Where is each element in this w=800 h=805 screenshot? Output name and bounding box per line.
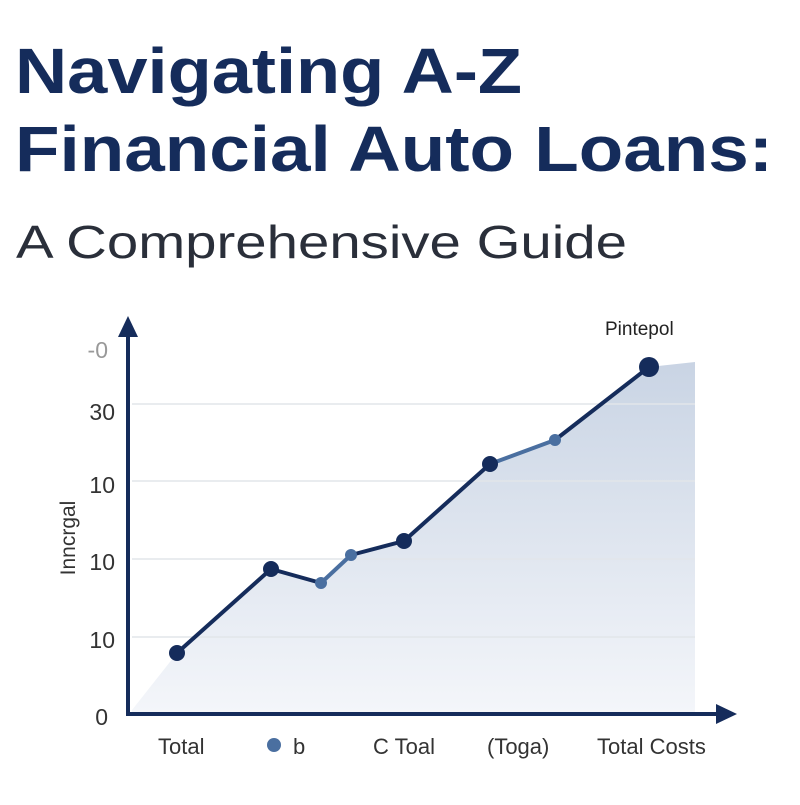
y tick labels: 0 xyxy=(95,704,108,730)
y tick labels: 10 xyxy=(89,627,115,653)
x labels: (Toga) xyxy=(487,734,549,759)
x labels: C Toal xyxy=(373,734,435,759)
area fill xyxy=(132,362,695,714)
y tick labels: 10 xyxy=(89,472,115,498)
x labels: Total Costs xyxy=(597,734,706,759)
title xyxy=(15,35,773,268)
x labels: Total xyxy=(158,734,204,759)
title: A Comprehensive Guide xyxy=(16,216,627,268)
chart xyxy=(57,316,737,759)
axes xyxy=(118,316,737,724)
y tick labels: 10 xyxy=(89,549,115,575)
x labels: b xyxy=(293,734,305,759)
y axis title: Inncrgal xyxy=(57,501,80,575)
y tick labels xyxy=(88,337,115,730)
data points xyxy=(169,357,659,661)
y tick labels: 30 xyxy=(89,399,115,425)
annotation: Pintepol xyxy=(605,319,674,340)
title: Financial Auto Loans: xyxy=(15,113,773,185)
y tick labels: -0 xyxy=(88,337,108,363)
data line xyxy=(177,367,649,653)
title: Navigating A-Z xyxy=(15,35,522,107)
x labels xyxy=(158,734,706,759)
